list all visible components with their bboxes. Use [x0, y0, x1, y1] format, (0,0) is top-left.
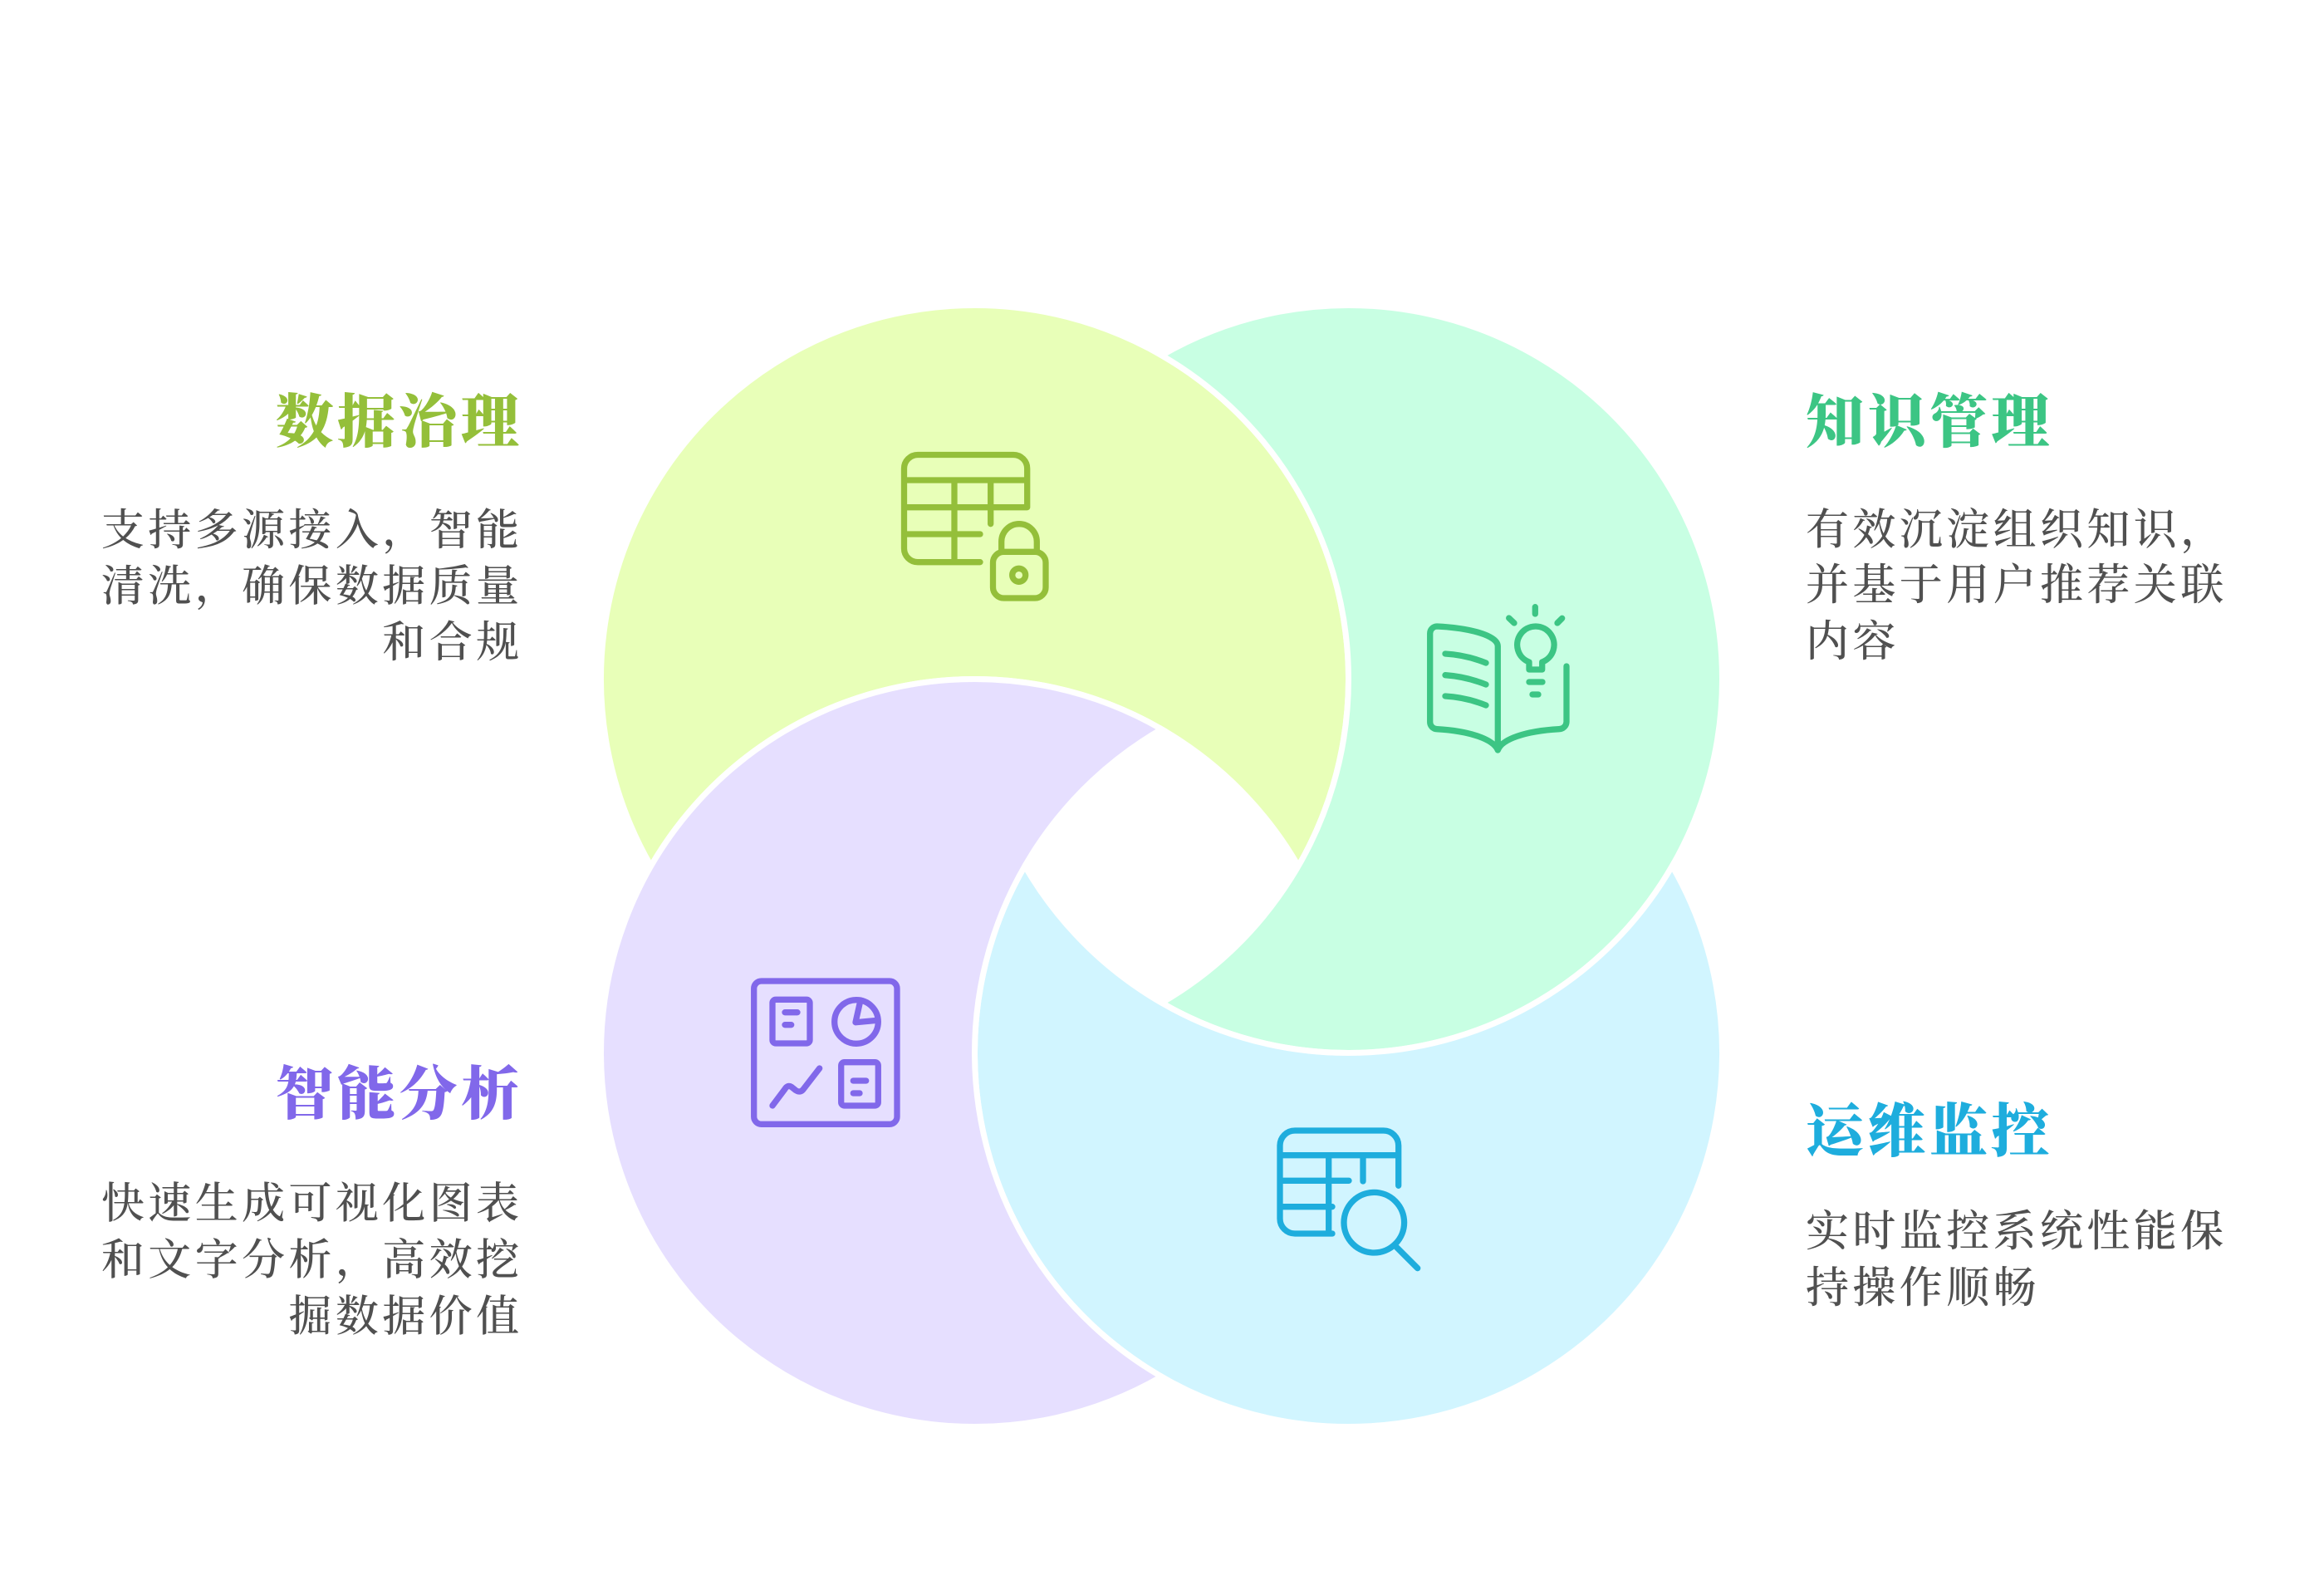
description: operations monitoring: 持操作顺畅	[1806, 1265, 2040, 1313]
description: data governance: 清洗，确保数据质量	[101, 563, 523, 611]
description: knowledge management: 并基于用户推荐关联	[1806, 562, 2228, 610]
heading: operations monitoring: 运维监控	[1806, 1100, 2053, 1165]
crescent: operations monitoring	[975, 866, 1723, 1427]
crescent: knowledge management	[1161, 306, 1723, 1053]
heading: knowledge management: 知识管理	[1806, 390, 2053, 455]
description: data governance: 支持多源接入，智能	[101, 508, 523, 555]
description: intelligent analysis	[101, 1181, 523, 1341]
description: data governance: 和合规	[382, 620, 523, 667]
description: intelligent analysis: 和文字分析，高效挖	[101, 1238, 523, 1284]
text block: data governance	[101, 391, 523, 667]
heading: data governance: 数据治理	[276, 391, 523, 455]
description: intelligent analysis: 快速生成可视化图表	[101, 1181, 523, 1228]
text block: knowledge management	[1806, 390, 2228, 666]
description: knowledge management	[1806, 507, 2228, 666]
icon: table with lock	[904, 455, 1046, 598]
icon: analytics dashboard	[754, 981, 897, 1124]
description: data governance	[101, 508, 523, 667]
crescent: data governance	[601, 305, 1349, 866]
description: intelligent analysis: 掘数据价值	[288, 1294, 523, 1341]
description: operations monitoring	[1806, 1209, 2228, 1313]
text block: intelligent analysis	[101, 1062, 523, 1341]
description: knowledge management: 内容	[1806, 619, 1900, 666]
icon: table with magnifier	[1280, 1131, 1418, 1268]
crescent: intelligent analysis	[601, 679, 1161, 1427]
panel: pinwheel diagram	[601, 305, 1723, 1427]
description: knowledge management: 有效沉淀组织知识，	[1806, 507, 2228, 555]
text block: operations monitoring	[1806, 1100, 2228, 1313]
description: operations monitoring: 实时监控系统性能保	[1806, 1209, 2228, 1256]
icon: open book with light bulb	[1430, 607, 1566, 750]
heading: intelligent analysis: 智能分析	[276, 1062, 523, 1127]
